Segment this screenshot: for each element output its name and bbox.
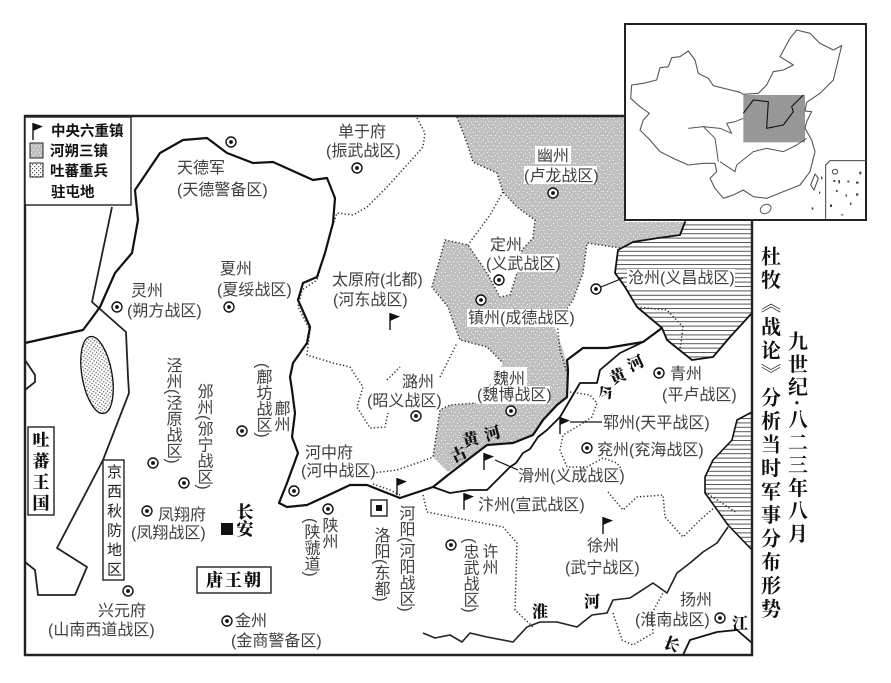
label: 太原府: (河东战区) bbox=[333, 291, 408, 309]
label: 郓州 bbox=[560, 414, 710, 434]
label: 许州: (忠武战区) bbox=[460, 538, 480, 613]
label: 灵州: (朔方战区) bbox=[127, 302, 202, 320]
yellow river bbox=[743, 95, 803, 128]
label: 沧州: 沧州(义昌战区) bbox=[628, 269, 735, 287]
label: 河中府: 河中府 bbox=[305, 444, 353, 462]
label: 汴州: 汴州(宣武战区) bbox=[478, 496, 585, 514]
label: 魏州: (魏博战区) bbox=[477, 386, 552, 404]
river label: 古黄河 bbox=[446, 419, 503, 467]
inset map: China locator bbox=[625, 24, 866, 220]
river label: 今黄河 bbox=[593, 349, 647, 406]
South China Sea box bbox=[826, 161, 866, 219]
label: 潞州: 潞州 bbox=[402, 373, 434, 391]
label: 滑州: 滑州(义成战区) bbox=[518, 467, 625, 485]
label: 潞州 bbox=[367, 373, 442, 421]
legend bbox=[25, 117, 131, 205]
label: 邠州: 邠州(邠宁战区) bbox=[194, 383, 214, 490]
river label: 长江: 江 bbox=[732, 611, 748, 634]
label: 灵州 bbox=[112, 282, 202, 320]
label: 凤翔府: (凤翔战区) bbox=[131, 524, 206, 542]
river label: 淮河: 河 bbox=[584, 589, 600, 612]
box: 唐王朝: 唐王朝 bbox=[206, 566, 263, 591]
legend gray swatch bbox=[30, 143, 43, 158]
title: vertical column 2: 九世纪·八二三年八月 bbox=[784, 331, 812, 546]
legend flag icon bbox=[33, 123, 43, 140]
river: Yangtze bbox=[683, 630, 752, 655]
label: 定州: (义武战区) bbox=[486, 255, 561, 273]
label: 陕州 bbox=[302, 504, 338, 577]
label: 河中府: (河中战区) bbox=[301, 462, 376, 480]
label: 滑州 bbox=[484, 453, 625, 485]
label: 定州: 定州 bbox=[490, 236, 522, 254]
label: 鄜州: (鄜坊战区) bbox=[254, 363, 272, 438]
river: old Yellow River bbox=[433, 328, 662, 487]
label: 邠州 bbox=[179, 383, 214, 490]
label: 河阳: 河阳(河阳战区) bbox=[396, 505, 416, 612]
label: 金州: 金州 bbox=[235, 612, 267, 630]
label: 单于府 bbox=[326, 123, 401, 173]
dotted boundaries bbox=[298, 117, 737, 645]
label: 沧州 bbox=[591, 269, 735, 294]
legend text: 河朔三镇 bbox=[50, 140, 108, 161]
label: 长安 bbox=[221, 502, 258, 538]
river: present Yellow River bbox=[433, 342, 643, 493]
label: 太原府 bbox=[332, 271, 423, 330]
label: 陕州: (陕虢道) bbox=[302, 518, 320, 577]
region: 河朔三镇 gray area bbox=[432, 117, 686, 472]
river label: 今黄河: 黄 bbox=[605, 360, 632, 389]
label: 青州 bbox=[654, 365, 737, 404]
label: 泾州: 泾州(泾原战区) bbox=[164, 357, 182, 464]
label: 青州: 青州 bbox=[670, 365, 702, 383]
label: 泾州 bbox=[148, 357, 182, 468]
legend text bbox=[50, 120, 124, 202]
region: 吐蕃重兵驻屯地 ellipse bbox=[75, 334, 119, 416]
label: 徐州: (武宁战区) bbox=[565, 559, 640, 577]
label: 单于府: 单于府 bbox=[338, 123, 386, 141]
label: 徐州 bbox=[565, 517, 640, 577]
label: 扬州: (淮南战区) bbox=[635, 611, 710, 629]
label: 兴元府: 兴元府 bbox=[98, 602, 146, 620]
box: 吐蕃王国: 吐蕃王国 bbox=[28, 431, 54, 515]
label: 灵州: 灵州 bbox=[131, 282, 163, 300]
label: 天德军: (天德警备区) bbox=[177, 181, 268, 199]
label: 单于府: (振武战区) bbox=[326, 142, 401, 160]
label: 潞州: (昭义战区) bbox=[367, 392, 442, 410]
label: 夏州 bbox=[217, 261, 292, 312]
label: 夏州: (夏绥战区) bbox=[217, 281, 292, 299]
river label: 古黄河: 黄 bbox=[459, 425, 484, 452]
label: 洛阳: 洛阳(东都) bbox=[372, 527, 390, 602]
label: 洛阳 bbox=[371, 500, 390, 602]
label: 金州 bbox=[222, 612, 322, 650]
Hainan and Taiwan bbox=[759, 202, 773, 216]
label: 魏州 bbox=[476, 367, 552, 416]
label: 郓州: 郓州(天平战区) bbox=[603, 414, 710, 432]
label: 兴元府: (山南西道战区) bbox=[48, 621, 155, 639]
region: Yellow Sea hatching bbox=[705, 412, 752, 550]
river label: 长江: 长 bbox=[660, 630, 683, 657]
China outline bbox=[631, 30, 842, 198]
river label: 淮河: 淮 bbox=[532, 599, 548, 622]
legend text: 吐蕃重兵 bbox=[50, 160, 108, 181]
label: 天德军: 天德军 bbox=[177, 159, 225, 177]
label: 青州: (平卢战区) bbox=[662, 386, 737, 404]
label: 许州: 许州 bbox=[480, 543, 498, 575]
label: 徐州: 徐州 bbox=[587, 537, 619, 555]
label: 幽州 bbox=[524, 146, 599, 198]
label: 陕州: 陕州 bbox=[320, 517, 338, 549]
label: 鄜州 bbox=[237, 363, 290, 438]
river label: 淮河 bbox=[532, 589, 600, 622]
label: 幽州: 幽州 bbox=[537, 147, 569, 165]
label: 金州: (金商警备区) bbox=[231, 632, 322, 650]
river label: 古黄河: 古 bbox=[446, 440, 470, 467]
coastline bbox=[615, 222, 752, 360]
label: 镇州 bbox=[467, 295, 575, 327]
label: 凤翔府: 凤翔府 bbox=[158, 506, 206, 524]
label: 许州 bbox=[446, 538, 498, 613]
legend text: 中央六重镇 bbox=[51, 120, 124, 141]
label: 长安: 长安 bbox=[232, 502, 258, 538]
inner rivers bbox=[688, 118, 807, 172]
label: 魏州: 魏州 bbox=[493, 370, 525, 388]
label: 河中府 bbox=[289, 444, 376, 496]
label: 夏州: 夏州 bbox=[220, 261, 252, 278]
region: Bohai sea hatching bbox=[615, 220, 752, 360]
label: 幽州: (卢龙战区) bbox=[524, 167, 599, 185]
river: Huai bbox=[423, 527, 728, 642]
label: 太原府: 太原府(北都) bbox=[332, 271, 423, 289]
western border of Tibet bbox=[25, 207, 129, 595]
label: 兖州: 兖州(兖海战区) bbox=[597, 441, 704, 459]
coastline: Yellow Sea bbox=[705, 412, 752, 550]
river label: 长江 bbox=[660, 611, 748, 657]
Tang border thick line bbox=[25, 138, 433, 507]
legend dotted swatch bbox=[30, 163, 43, 177]
river label: 今黄河: 今 bbox=[593, 378, 618, 406]
map frame bbox=[25, 116, 752, 655]
box: 京西秋防地区: 京西秋防地区 bbox=[105, 464, 122, 581]
river label: 今黄河: 河 bbox=[623, 349, 647, 376]
highlighted rectangle bbox=[743, 95, 805, 142]
label: 兴元府 bbox=[48, 586, 155, 639]
label: 鄜州: 鄜州 bbox=[272, 400, 290, 432]
label: 天德军 bbox=[177, 137, 268, 199]
label: 扬州 bbox=[635, 591, 725, 629]
label: 镇州: 镇州(成德战区) bbox=[468, 309, 575, 327]
legend text: 驻屯地 bbox=[51, 181, 95, 202]
label: 凤翔府 bbox=[131, 506, 206, 542]
label: 定州 bbox=[486, 236, 561, 285]
islands bbox=[812, 172, 861, 215]
river label: 古黄河: 河 bbox=[481, 419, 503, 446]
label: 扬州: 扬州 bbox=[680, 591, 712, 609]
panel: main map bbox=[25, 116, 752, 657]
title: vertical column 1: 杜牧《战论》分析当时军事分布形势 bbox=[756, 245, 786, 622]
